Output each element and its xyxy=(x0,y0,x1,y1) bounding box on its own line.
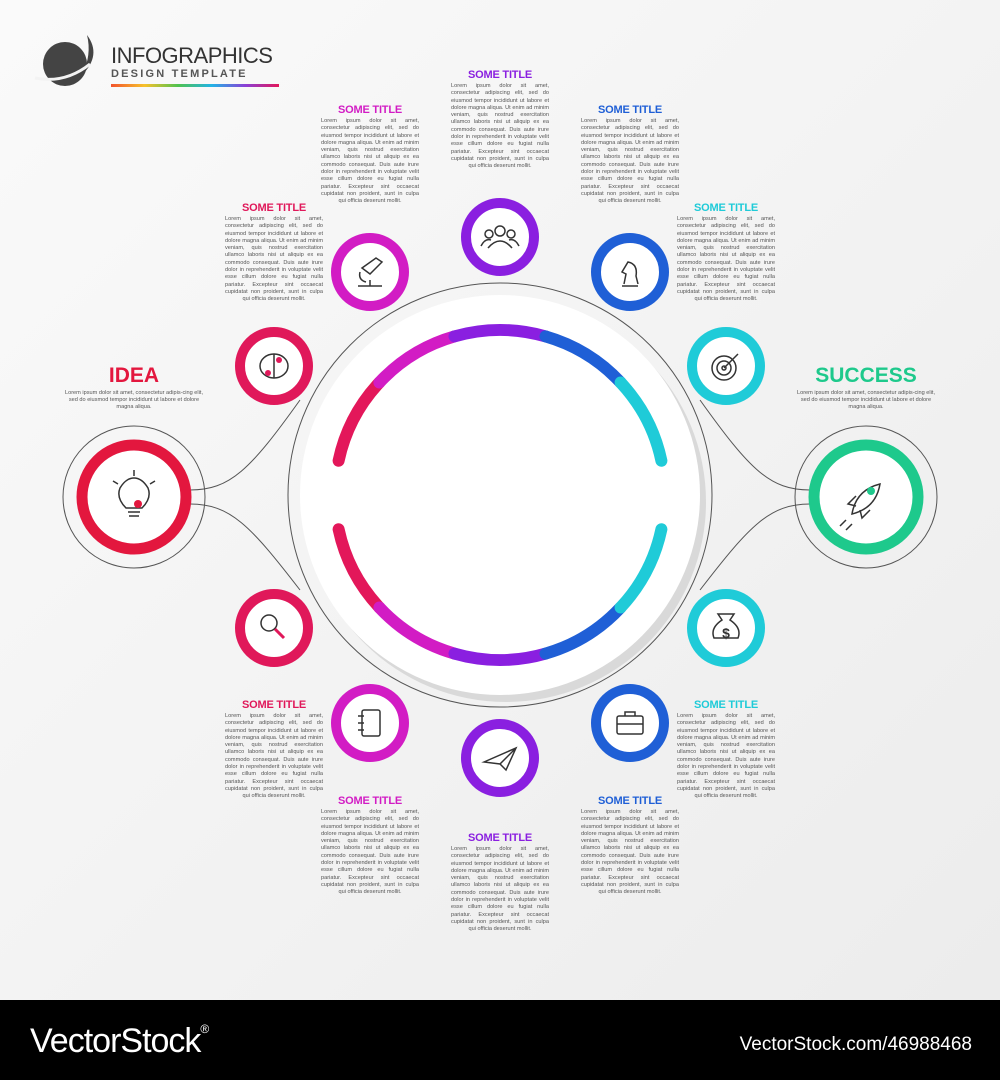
text 4: SOME TITLE xyxy=(598,104,662,116)
icon circles xyxy=(82,203,918,792)
text 7: SOME TITLE xyxy=(338,795,402,807)
text 6: Lorem ipsum dolor sit amet, consectetur adipiscing elit, sed do eiusmod tempor incididunt ut labore et dolore magna aliqua. Ut enim ad minim veniam, quis nostrud exercitation ullamco laboris nisi ut aliquip ex ea commodo consequat. Duis aute irure dolor in reprehenderit in voluptate velit esse cillum dolore eu fugiat nulla pariatur. Excepteur sint occaecat cupidatat non proident, sunt in culpa qui officia deserunt mollit. xyxy=(225,713,323,799)
magnifier xyxy=(261,615,277,631)
text 10: Lorem ipsum dolor sit amet, consectetur adipiscing elit, sed do eiusmod tempor incididunt ut labore et dolore magna aliqua. Ut enim ad minim veniam, quis nostrud exercitation ullamco laboris nisi ut aliquip ex ea commodo consequat. Duis aute irure dolor in reprehenderit in voluptate velit esse cillum dolore eu fugiat nulla pariatur. Excepteur sint occaecat cupidatat non proident, sunt in culpa qui officia deserunt mollit. xyxy=(677,713,775,799)
text 9: SOME TITLE xyxy=(598,795,662,807)
header title xyxy=(111,43,279,87)
text 9: Lorem ipsum dolor sit amet, consectetur adipiscing elit, sed do eiusmod tempor incididunt ut labore et dolore magna aliqua. Ut enim ad minim veniam, quis nostrud exercitation ullamco laboris nisi ut aliquip ex ea commodo consequat. Duis aute irure dolor in reprehenderit in voluptate velit esse cillum dolore eu fugiat nulla pariatur. Excepteur sint occaecat cupidatat non proident, sunt in culpa qui officia deserunt mollit. xyxy=(581,809,679,895)
text 6: SOME TITLE xyxy=(242,699,306,711)
footer bar xyxy=(0,1000,1000,1080)
people xyxy=(495,226,505,236)
connector lines xyxy=(63,283,937,707)
rocket xyxy=(848,484,880,518)
IDEA xyxy=(65,364,203,410)
text 3: Lorem ipsum dolor sit amet, consectetur adipiscing elit, sed do eiusmod tempor incididunt ut labore et dolore magna aliqua. Ut enim ad minim veniam, quis nostrud exercitation ullamco laboris nisi ut aliquip ex ea commodo consequat. Duis aute irure dolor in reprehenderit in voluptate velit esse cillum dolore eu fugiat nulla pariatur. Excepteur sint occaecat cupidatat non proident, sunt in culpa qui officia deserunt mollit. xyxy=(451,83,549,169)
IDEA: Lorem ipsum dolor sit amet, consectetur adipis-cing elit, sed do eiusmod tempor incididunt ut labore et dolore magna aliqua. xyxy=(65,390,203,410)
money bag xyxy=(713,614,739,638)
text 1: Lorem ipsum dolor sit amet, consectetur adipiscing elit, sed do eiusmod tempor incididunt ut labore et dolore magna aliqua. Ut enim ad minim veniam, quis nostrud exercitation ullamco laboris nisi ut aliquip ex ea commodo consequat. Duis aute irure dolor in reprehenderit in voluptate velit esse cillum dolore eu fugiat nulla pariatur. Excepteur sint occaecat cupidatat non proident, sunt in culpa qui officia deserunt mollit. xyxy=(225,216,323,302)
brain xyxy=(260,354,288,378)
text 5: Lorem ipsum dolor sit amet, consectetur adipiscing elit, sed do eiusmod tempor incididunt ut labore et dolore magna aliqua. Ut enim ad minim veniam, quis nostrud exercitation ullamco laboris nisi ut aliquip ex ea commodo consequat. Duis aute irure dolor in reprehenderit in voluptate velit esse cillum dolore eu fugiat nulla pariatur. Excepteur sint occaecat cupidatat non proident, sunt in culpa qui officia deserunt mollit. xyxy=(677,216,775,302)
text 2: Lorem ipsum dolor sit amet, consectetur adipiscing elit, sed do eiusmod tempor incididunt ut labore et dolore magna aliqua. Ut enim ad minim veniam, quis nostrud exercitation ullamco laboris nisi ut aliquip ex ea commodo consequat. Duis aute irure dolor in reprehenderit in voluptate velit esse cillum dolore eu fugiat nulla pariatur. Excepteur sint occaecat cupidatat non proident, sunt in culpa qui officia deserunt mollit. xyxy=(321,118,419,204)
SUCCESS xyxy=(797,364,935,410)
microscope xyxy=(358,258,382,286)
logo xyxy=(35,35,93,86)
text 2: SOME TITLE xyxy=(338,104,402,116)
chess knight xyxy=(622,262,638,286)
briefcase xyxy=(617,716,643,734)
central circle xyxy=(300,295,706,702)
text 3: SOME TITLE xyxy=(468,69,532,81)
ring arcs xyxy=(339,330,661,660)
header title: INFOGRAPHICS xyxy=(111,43,272,68)
text 8: SOME TITLE xyxy=(468,832,532,844)
IDEA: IDEA xyxy=(109,364,159,387)
text 4: Lorem ipsum dolor sit amet, consectetur adipiscing elit, sed do eiusmod tempor incididunt ut labore et dolore magna aliqua. Ut enim ad minim veniam, quis nostrud exercitation ullamco laboris nisi ut aliquip ex ea commodo consequat. Duis aute irure dolor in reprehenderit in voluptate velit esse cillum dolore eu fugiat nulla pariatur. Excepteur sint occaecat cupidatat non proident, sunt in culpa qui officia deserunt mollit. xyxy=(581,118,679,204)
SUCCESS: SUCCESS xyxy=(815,364,917,387)
text 5: SOME TITLE xyxy=(694,202,758,214)
SUCCESS: Lorem ipsum dolor sit amet, consectetur adipis-cing elit, sed do eiusmod tempor incididunt ut labore et dolore magna aliqua. xyxy=(797,390,935,410)
notebook xyxy=(362,710,380,736)
text 10: SOME TITLE xyxy=(694,699,758,711)
text 7: Lorem ipsum dolor sit amet, consectetur adipiscing elit, sed do eiusmod tempor incididunt ut labore et dolore magna aliqua. Ut enim ad minim veniam, quis nostrud exercitation ullamco laboris nisi ut aliquip ex ea commodo consequat. Duis aute irure dolor in reprehenderit in voluptate velit esse cillum dolore eu fugiat nulla pariatur. Excepteur sint occaecat cupidatat non proident, sunt in culpa qui officia deserunt mollit. xyxy=(321,809,419,895)
footer bar: VectorStock® xyxy=(30,1022,208,1060)
bulb xyxy=(119,478,149,516)
header title: DESIGN TEMPLATE xyxy=(111,68,248,80)
text 1: SOME TITLE xyxy=(242,202,306,214)
plane xyxy=(484,748,516,770)
target xyxy=(712,356,736,380)
text 8: Lorem ipsum dolor sit amet, consectetur adipiscing elit, sed do eiusmod tempor incididunt ut labore et dolore magna aliqua. Ut enim ad minim veniam, quis nostrud exercitation ullamco laboris nisi ut aliquip ex ea commodo consequat. Duis aute irure dolor in reprehenderit in voluptate velit esse cillum dolore eu fugiat nulla pariatur. Excepteur sint occaecat cupidatat non proident, sunt in culpa qui officia deserunt mollit. xyxy=(451,846,549,932)
footer bar: VectorStock.com/46988468 xyxy=(740,1034,972,1055)
icon circles: $ xyxy=(722,625,730,641)
